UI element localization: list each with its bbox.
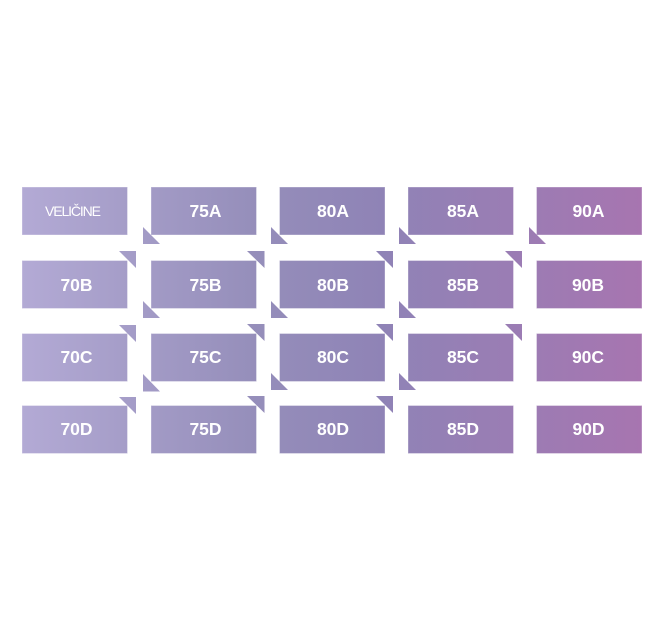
cell: 90D [536, 406, 642, 454]
cell: 90B: 90B [572, 275, 604, 295]
cell: 80B [280, 260, 385, 308]
cell: 80B: 80B [317, 275, 349, 295]
cell: 70C [22, 334, 128, 382]
cell: 80C: 80C [317, 347, 349, 367]
header cell: VELIČINE: VELIČINE [45, 203, 101, 219]
corner triangles, bottom-left [143, 227, 546, 392]
size table [22, 187, 642, 454]
cell: 90B [536, 260, 642, 308]
cell: 90C [536, 334, 642, 382]
cell: 90A [536, 187, 642, 235]
cell: 85D [408, 406, 514, 454]
cell: 85B: 85B [447, 275, 479, 295]
corner triangles, top-right [119, 251, 522, 414]
cell: 75D [151, 406, 256, 454]
cell: 85D: 85D [447, 419, 479, 439]
cell: 80A [280, 187, 385, 235]
cell: 75B [151, 260, 256, 308]
cell: 85A [408, 187, 514, 235]
cell: 70D [22, 406, 128, 454]
cell: 85C [408, 334, 514, 382]
cell: 80A: 80A [317, 201, 349, 221]
cell: 75A [151, 187, 256, 235]
cell: 90D: 90D [572, 419, 605, 439]
cell: 85C: 85C [447, 347, 479, 367]
cell: 75C: 75C [189, 347, 222, 367]
cell: 70D: 70D [60, 419, 93, 439]
cell: 80D: 80D [317, 419, 349, 439]
cell: 90C: 90C [572, 347, 604, 367]
cell: 85B [408, 260, 514, 308]
cell: 75B: 75B [189, 275, 222, 295]
header cell: VELIČINE [22, 187, 128, 235]
cell: 70B: 70B [60, 275, 93, 295]
cell: 70B [22, 260, 128, 308]
cell: 80D [280, 406, 385, 454]
cell: 80C [280, 334, 385, 382]
cell: 75A: 75A [189, 201, 222, 221]
cell: 85A: 85A [447, 201, 479, 221]
cell: 90A: 90A [572, 201, 605, 221]
cell: 70C: 70C [60, 347, 93, 367]
cell: 75C [151, 334, 256, 382]
cell: 75D: 75D [189, 419, 222, 439]
